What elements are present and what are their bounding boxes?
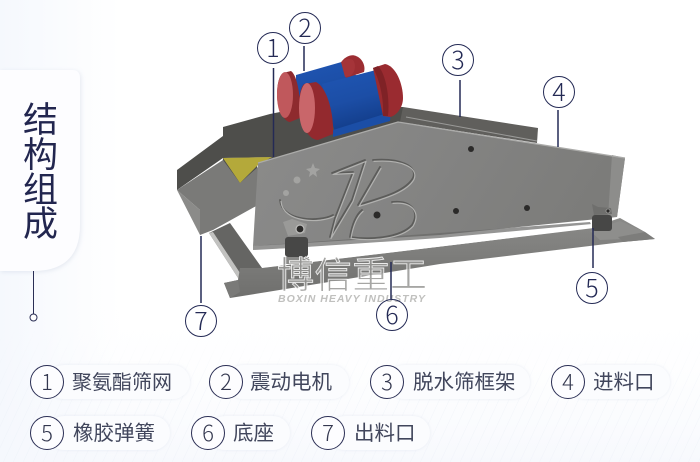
legend item 1 bbox=[30, 365, 190, 399]
legend item 3 bbox=[370, 365, 530, 399]
callout 6 bbox=[376, 262, 408, 332]
legend item 4: 4 bbox=[562, 365, 574, 397]
callout 5 bbox=[576, 228, 608, 305]
watermark brand name: 博信重工 bbox=[277, 245, 427, 299]
right rubber spring mount bbox=[592, 204, 612, 231]
yellow screen mesh bbox=[223, 157, 272, 183]
callout 1: 1 bbox=[266, 29, 280, 65]
callout 3: 3 bbox=[451, 41, 465, 77]
logo stars bbox=[283, 163, 320, 196]
callout 6: 6 bbox=[385, 296, 399, 332]
callout 2: 2 bbox=[298, 9, 312, 45]
holes bbox=[374, 146, 530, 218]
legend item 7: 出料口 bbox=[354, 416, 416, 446]
legend item 5: 橡胶弹簧 bbox=[73, 416, 155, 446]
base frame bbox=[209, 218, 655, 298]
legend item 2 bbox=[210, 365, 349, 399]
callouts bbox=[186, 9, 608, 338]
callout 3 bbox=[442, 41, 474, 117]
legend bbox=[30, 365, 670, 450]
title: 结构组成: 组 bbox=[23, 162, 58, 213]
left rubber spring mount bbox=[283, 219, 309, 264]
side plate bbox=[253, 122, 625, 246]
title: 结构组成: 构 bbox=[23, 127, 58, 178]
legend item 6: 6 bbox=[202, 416, 214, 448]
legend item 1: 1 bbox=[41, 365, 53, 397]
legend item 6: 底座 bbox=[233, 416, 274, 446]
legend item 3: 3 bbox=[381, 365, 393, 397]
discharge chute bbox=[177, 160, 258, 235]
title: 结构组成 bbox=[23, 92, 58, 247]
title connector line and dot bbox=[30, 271, 37, 321]
embossed logo mark bbox=[280, 160, 416, 240]
legend item 4 bbox=[552, 365, 670, 399]
callout 4: 4 bbox=[552, 73, 566, 109]
panel: title card bbox=[0, 70, 80, 271]
legend item 1: 聚氨酯筛网 bbox=[72, 366, 172, 395]
watermark brand name: BOXIN HEAVY INDUSTRY bbox=[278, 293, 426, 305]
callout 1 bbox=[258, 29, 288, 157]
motors bbox=[277, 55, 403, 140]
callout 5: 5 bbox=[585, 269, 599, 305]
white gap beneath plate bbox=[262, 224, 594, 268]
legend item 2: 震动电机 bbox=[250, 365, 332, 395]
callout 4 bbox=[544, 73, 574, 147]
callout 2 bbox=[290, 9, 320, 71]
rear motor bbox=[296, 61, 358, 120]
machine illustration bbox=[177, 55, 655, 305]
title: 结构组成: 成 bbox=[23, 196, 58, 247]
legend item 2: 2 bbox=[220, 365, 232, 397]
callout 7 bbox=[186, 236, 216, 338]
callout 7: 7 bbox=[194, 302, 208, 338]
legend item 3: 脱水筛框架 bbox=[413, 365, 516, 395]
legend item 5 bbox=[30, 416, 170, 450]
front motor bbox=[322, 70, 391, 133]
hopper back dark wall bbox=[177, 107, 410, 190]
title: 结构组成: 结 bbox=[23, 92, 58, 143]
panel 3 rear screen frame bbox=[400, 107, 538, 143]
legend item 7: 7 bbox=[322, 416, 334, 448]
legend item 7 bbox=[312, 416, 430, 450]
legend item 6 bbox=[192, 416, 290, 450]
legend item 5: 5 bbox=[41, 416, 53, 448]
legend item 4: 进料口 bbox=[593, 365, 654, 395]
